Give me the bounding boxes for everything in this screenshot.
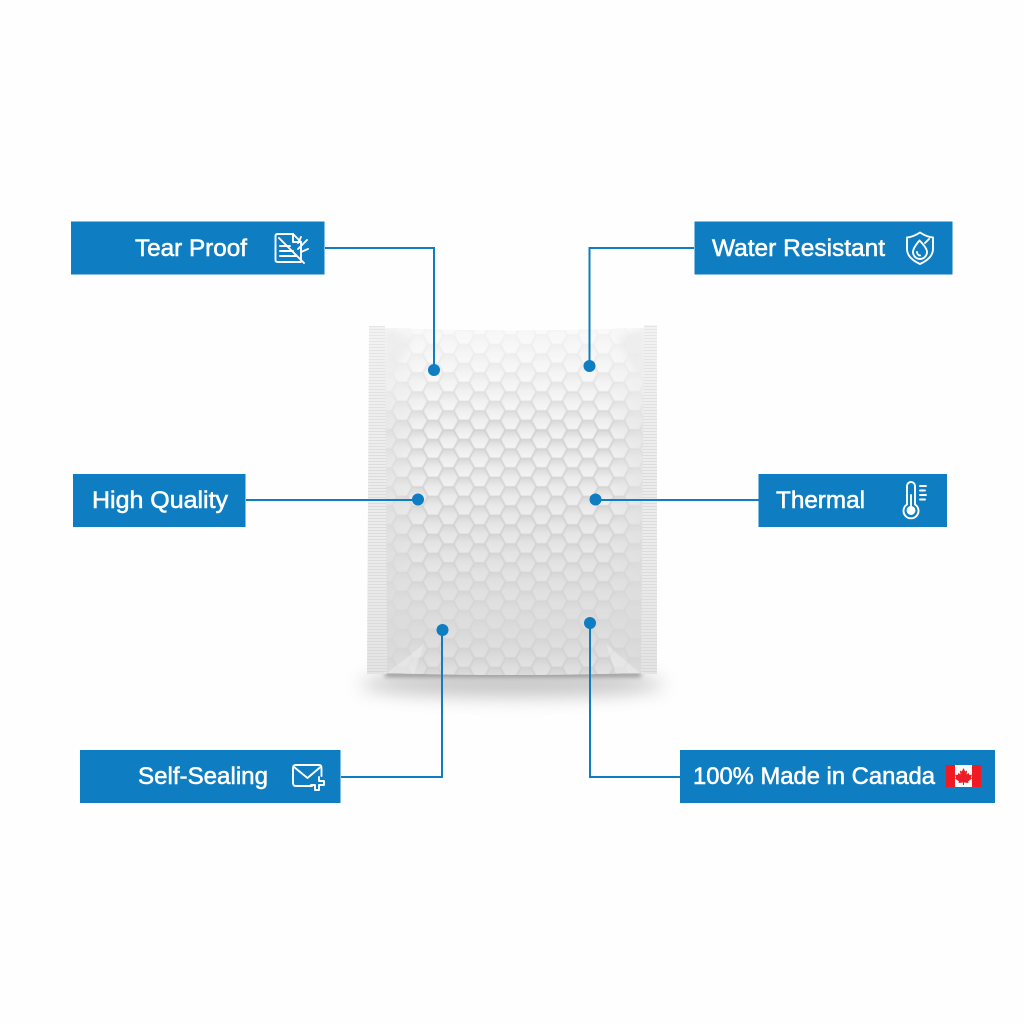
icon: thermometer xyxy=(904,482,926,518)
label: 100% Made in Canada: 100% Made in Canada xyxy=(693,763,936,790)
connector: Tear Proof xyxy=(325,248,440,376)
label: Tear Proof xyxy=(71,222,324,274)
icon: envelope with plus xyxy=(293,765,324,790)
label: Tear Proof: Tear Proof xyxy=(135,235,247,262)
label: 100% Made in Canada xyxy=(680,750,995,803)
icon: torn document xyxy=(276,234,308,263)
icon: Canadian flag xyxy=(946,765,981,787)
label: Self-Sealing xyxy=(80,750,340,803)
connector: 100% Made in Canada xyxy=(584,617,680,777)
connector: Self-Sealing xyxy=(341,624,448,777)
connector: Thermal xyxy=(590,494,759,506)
label: Thermal xyxy=(758,474,947,527)
label: Water Resistant: Water Resistant xyxy=(712,235,885,262)
label: High Quality: High Quality xyxy=(92,487,228,514)
label: Self-Sealing: Self-Sealing xyxy=(138,763,268,790)
label: Water Resistant xyxy=(694,222,952,274)
icon: shield with water drop xyxy=(907,232,933,264)
label: High Quality xyxy=(73,474,246,527)
connector: Water Resistant xyxy=(584,248,694,372)
connector: High Quality xyxy=(246,494,424,506)
label: Thermal: Thermal xyxy=(776,487,865,514)
product: white bubble mailer xyxy=(360,322,664,697)
